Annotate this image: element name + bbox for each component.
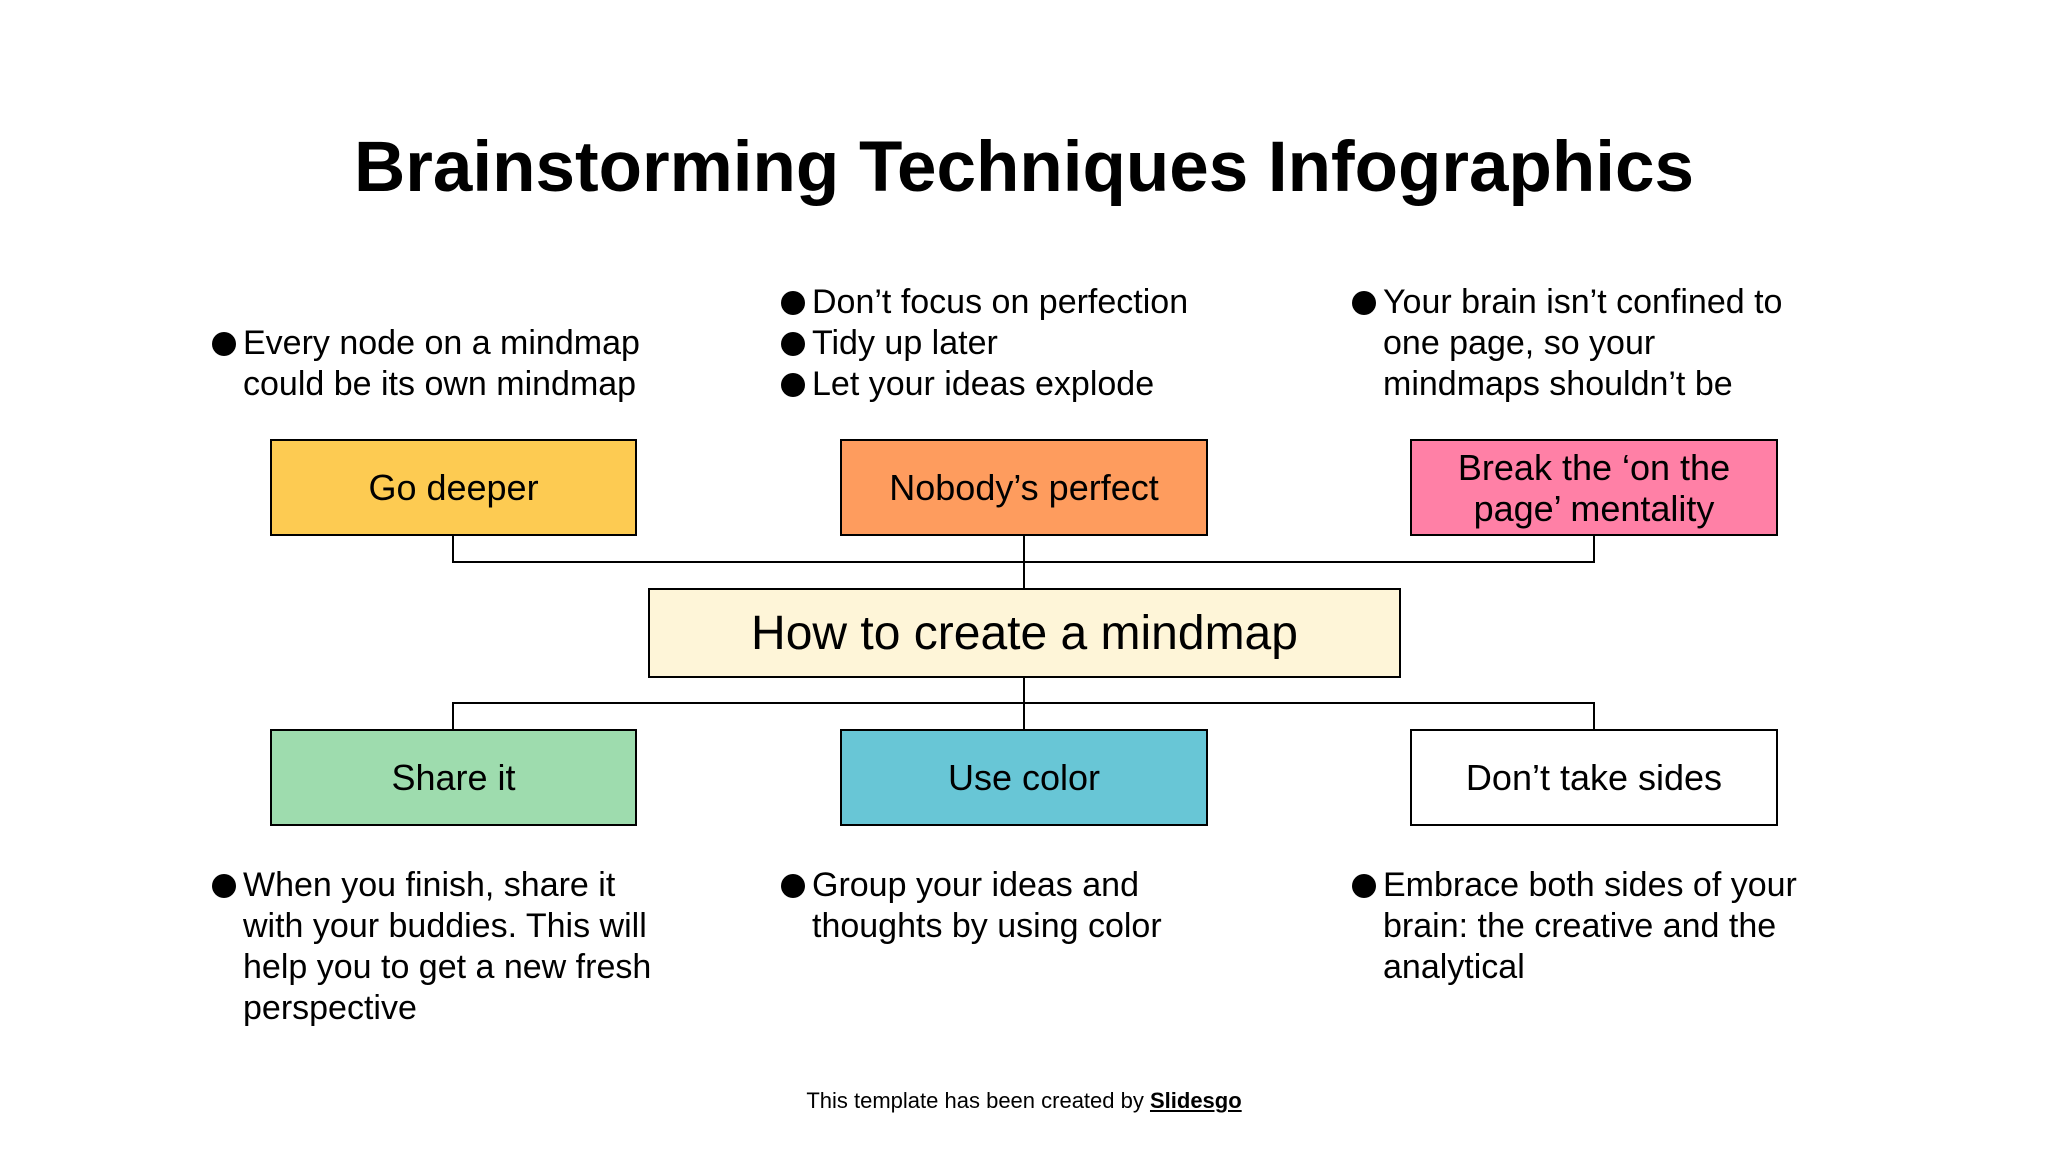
text block: share it bbox=[212, 866, 651, 1027]
text block: use color bbox=[781, 866, 1162, 945]
box: Break the page mentality bbox=[1410, 439, 1778, 536]
text block: use color: Group your ideas and bbox=[812, 866, 1139, 904]
center box bbox=[648, 588, 1401, 678]
text block: break the page: Your brain isn’t confined to bbox=[1383, 283, 1782, 321]
title: Brainstorming Techniques Infographics bbox=[354, 128, 1694, 207]
text block: break the page bbox=[1352, 283, 1782, 403]
box: Use color bbox=[840, 729, 1208, 826]
text block: don't take sides: Embrace both sides of your bbox=[1383, 866, 1797, 904]
box: Share it bbox=[270, 729, 637, 826]
box: Don't take sides: Don’t take sides bbox=[1466, 757, 1722, 798]
text block: nobody's perfect: Tidy up later bbox=[812, 324, 998, 362]
center box: How to create a mindmap bbox=[751, 606, 1298, 660]
text block: nobody's perfect: Don’t focus on perfection bbox=[812, 283, 1188, 321]
box: Go deeper bbox=[270, 439, 637, 536]
footer: This template has been created by Slidesgo bbox=[806, 1088, 1242, 1113]
connector: bottom bbox=[452, 678, 1595, 729]
text block: share it: with your buddies. This will bbox=[243, 907, 647, 945]
box: Share it: Share it bbox=[391, 757, 516, 798]
text block: go deeper: could be its own mindmap bbox=[243, 365, 636, 403]
box: Don't take sides bbox=[1410, 729, 1778, 826]
box: Use color: Use color bbox=[948, 757, 1100, 798]
text block: don't take sides bbox=[1352, 866, 1797, 986]
box: Break the page mentality: page’ mentality bbox=[1474, 488, 1714, 528]
text block: don't take sides: brain: the creative and the bbox=[1383, 907, 1776, 945]
connector: top bbox=[452, 536, 1595, 588]
text block: break the page: one page, so your bbox=[1383, 324, 1655, 362]
text block: share it: When you finish, share it bbox=[243, 866, 615, 904]
text block: go deeper: Every node on a mindmap bbox=[243, 324, 640, 362]
text block: nobody's perfect bbox=[781, 283, 1188, 403]
box: Nobody's perfect: Nobody’s perfect bbox=[889, 467, 1159, 508]
text block: nobody's perfect: Let your ideas explode bbox=[812, 365, 1154, 403]
text block: share it: perspective bbox=[243, 989, 417, 1027]
box: Nobody's perfect bbox=[840, 439, 1208, 536]
text block: use color: thoughts by using color bbox=[812, 907, 1162, 945]
box: Go deeper: Go deeper bbox=[368, 467, 539, 508]
text block: don't take sides: analytical bbox=[1383, 948, 1525, 986]
text block: go deeper bbox=[212, 324, 640, 403]
text block: break the page: mindmaps shouldn’t be bbox=[1383, 365, 1733, 403]
text block: share it: help you to get a new fresh bbox=[243, 948, 651, 986]
box: Break the page mentality: Break the ‘on the bbox=[1458, 446, 1730, 488]
